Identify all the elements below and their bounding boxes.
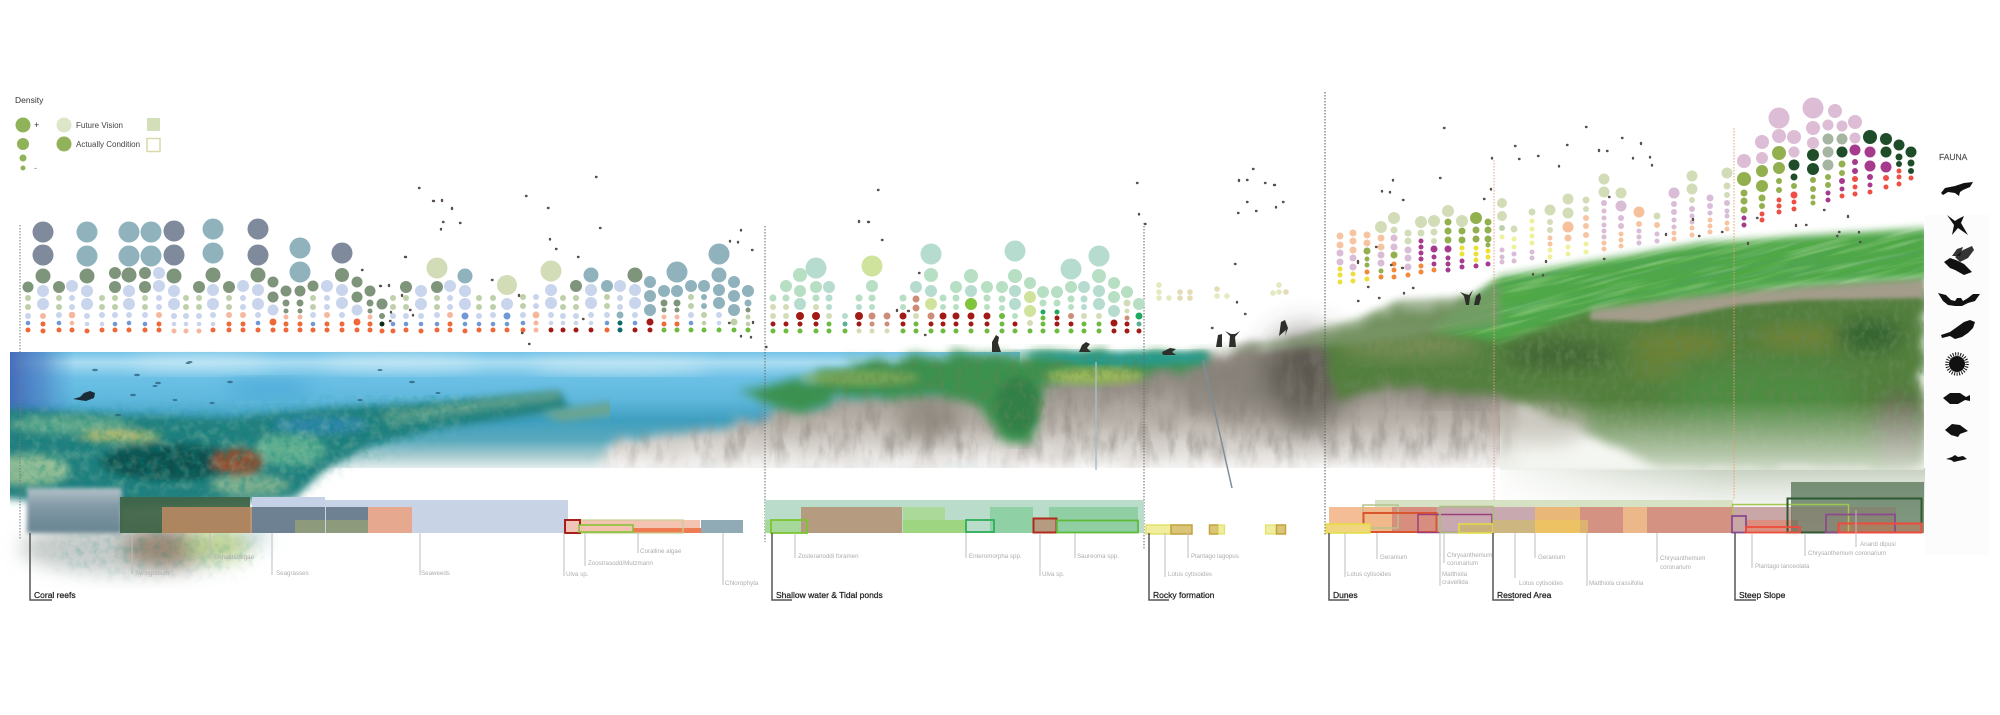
species labels and leader lines: Lotus cytisoides [1168,571,1212,578]
species labels and leader lines: Chrysanthemum [1660,555,1705,562]
actual condition key: Actually Condition [76,140,140,149]
icon: bee [1944,246,1974,275]
seabed and cliff soil [560,330,1540,472]
species labels and leader lines: coronarium [1447,560,1478,567]
icon: eagle [1941,182,1973,196]
diver silhouette [73,391,95,401]
lower coral fade below section [14,528,274,586]
actual condition key [56,136,160,152]
rock ledge [1590,277,1924,322]
dune moss [1320,285,1926,470]
fauna column [1938,152,1980,462]
species labels and leader lines: cravellida [1442,579,1469,586]
icon: swallow [1947,215,1968,235]
section label: shallow water and tidal ponds [772,533,883,600]
species labels and leader lines: Saureoma spp. [1077,553,1119,560]
species labels and leader lines: Chlorophyta [725,580,759,587]
bar chart: steep slope species [1732,482,1924,533]
species labels and leader lines: Matthiola [1442,571,1468,578]
dot chart: dunes [1336,205,1492,284]
dotted section dividers [20,92,1734,550]
dot chart: steep slope [1737,98,1916,228]
section label: dunes: Dunes [1333,590,1358,600]
species labels and leader lines: Plantago lanceolata [1755,563,1810,570]
dune grass [1435,222,1924,345]
small fish [92,361,440,416]
species labels and leader lines: Ulva sp. [566,571,589,578]
species labels and leader lines: Geranium [1538,554,1565,561]
dot chart: restored area [1497,168,1732,264]
species labels and leader lines: Geranium [1380,554,1407,561]
rope line [1203,360,1232,488]
section label: restored area [1493,533,1552,600]
plus and minus marks: - [34,163,37,173]
vertical water seep [1095,362,1097,470]
species labels and leader lines: Lotus cytisoides [1347,571,1391,578]
species labels and leader lines: Coralline algae [640,548,682,555]
fauna heading: FAUNA [1939,152,1968,162]
species labels and leader lines: Plantago lagopus [1191,553,1239,560]
species labels and leader lines: coronarium [1660,564,1691,571]
species labels and leader lines: Enhalus/Algae [214,554,254,561]
species labels and leader lines: Zoostrasodd/Mutzmann [588,560,654,567]
section label: rocky formation: Rocky formation [1153,590,1215,600]
dot chart: coral reefs [22,218,754,334]
figures and silhouettes [992,290,1481,355]
species labels and leader lines: Ulva sp. [1042,571,1065,578]
density scale circles [16,118,30,170]
hillock grass [1205,282,1500,352]
section label: shallow water and tidal ponds: Shallow water & Tidal ponds [776,590,883,600]
plus and minus marks [34,120,39,173]
species labels and leader lines: Anardi dipusi [1860,541,1896,548]
species labels and leader lines: Chrysanthemum [1447,552,1492,559]
bar chart: dunes species [1326,500,1733,533]
species labels and leader lines: Zosteranoddi foramen [798,553,859,560]
species labels and leader lines: Chrysanthemum coronarium [1808,550,1886,557]
section label: restored area: Restored Area [1497,590,1552,600]
icon: bat [1938,293,1980,306]
water [10,352,1020,468]
species labels and leader lines: Enteromorpha spp. [969,553,1022,560]
species labels and leader lines [132,510,1896,587]
species labels and leader lines: Seagrasses [276,570,309,577]
species labels and leader lines: Syringodium [135,570,169,577]
bar chart: shallow water species [765,500,1144,533]
section label: coral reefs: Coral reefs [34,590,76,600]
icon: small fish [1946,455,1967,462]
icon: fish [1943,393,1970,404]
icon: reef fish [1945,424,1968,437]
legend: density [15,95,160,173]
section label: steep slope [1735,533,1786,600]
section label: dunes [1329,533,1358,600]
lower grass fade right [1480,215,1990,555]
bar chart: rocky formation species [1146,525,1286,534]
species labels and leader lines: Matthiola crassifolia [1589,580,1644,587]
coral reef [10,386,610,510]
dot chart: rocky formation [1156,282,1289,301]
species labels and leader lines: Seaweeds [421,570,450,577]
plus and minus marks: + [34,120,39,130]
flying birds and insects [362,127,1860,347]
legend title: Density [15,95,44,105]
section label: rocky formation [1149,533,1215,600]
section label: steep slope: Steep Slope [1739,590,1786,600]
landscape cross-section [0,110,1990,587]
future vision key: Future Vision [76,121,123,130]
tidal grass [740,345,1210,445]
icon: sea urchin [1947,354,1967,374]
future vision key [56,118,160,132]
bar chart: restored area species [1493,507,1732,533]
species labels and leader lines: Lotus cytisoides [1519,580,1563,587]
section label: coral reefs [30,533,76,600]
bar chart: coral reefs species [27,488,743,533]
icon: seal [1941,320,1975,339]
coral haze block [27,488,122,533]
dot chart: shallow water and tidal ponds [770,240,1145,334]
